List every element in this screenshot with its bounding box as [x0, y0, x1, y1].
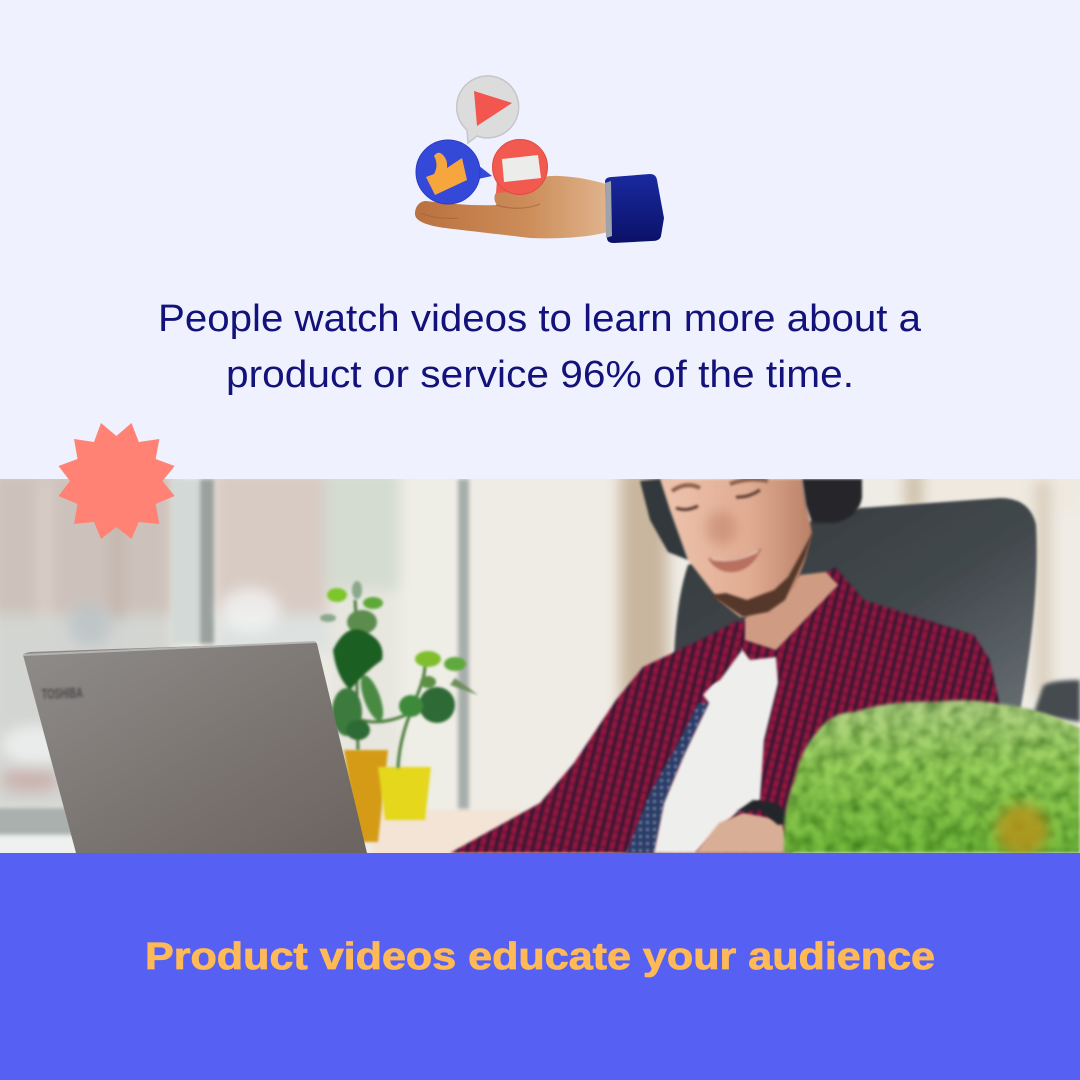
- yellow pot: [378, 767, 431, 820]
- man: [450, 479, 1002, 853]
- body text: People watch videos to learn more about a: [158, 298, 922, 340]
- body text: [158, 298, 922, 396]
- left headphone: [640, 479, 688, 560]
- dotted shirt placket: [626, 703, 709, 853]
- footer band: [0, 853, 1080, 1080]
- small chair in background: [1033, 680, 1080, 722]
- white t-shirt: [654, 647, 778, 853]
- wrist watch: [736, 800, 793, 825]
- beard: [710, 530, 814, 617]
- icon: grey play bubble: [457, 76, 519, 143]
- icon: blue thumbs-up bubble: [416, 140, 492, 204]
- shirt collar: [695, 622, 742, 690]
- neck: [745, 572, 838, 650]
- orange pot: [344, 750, 388, 842]
- icon: red video bubble: [492, 140, 548, 194]
- leaves: [320, 581, 478, 768]
- headline: Product videos educate your audience: [145, 936, 935, 978]
- laptop logo: TOSHIBA: [42, 685, 83, 703]
- shirt: [450, 567, 1002, 853]
- hand: [695, 813, 790, 853]
- plants in yellow pots: [320, 581, 478, 842]
- icon: hand holding social video bubbles: [415, 76, 664, 243]
- photo: man with headphones at laptop: [0, 470, 1080, 870]
- icon: blue shirt cuff: [605, 174, 664, 243]
- yellow pot glimpse: [996, 804, 1048, 856]
- facial features: [672, 480, 768, 572]
- body text: product or service 96% of the time.: [226, 354, 854, 396]
- right headphone: [802, 479, 862, 523]
- icon: open hand: [415, 176, 608, 238]
- face: [659, 479, 812, 617]
- green bush foreground: [784, 700, 1080, 856]
- photo background: window and wall: [0, 470, 1080, 870]
- laptop: [23, 642, 367, 853]
- decorative coral starburst: [58, 423, 175, 539]
- office chair: [674, 498, 1037, 720]
